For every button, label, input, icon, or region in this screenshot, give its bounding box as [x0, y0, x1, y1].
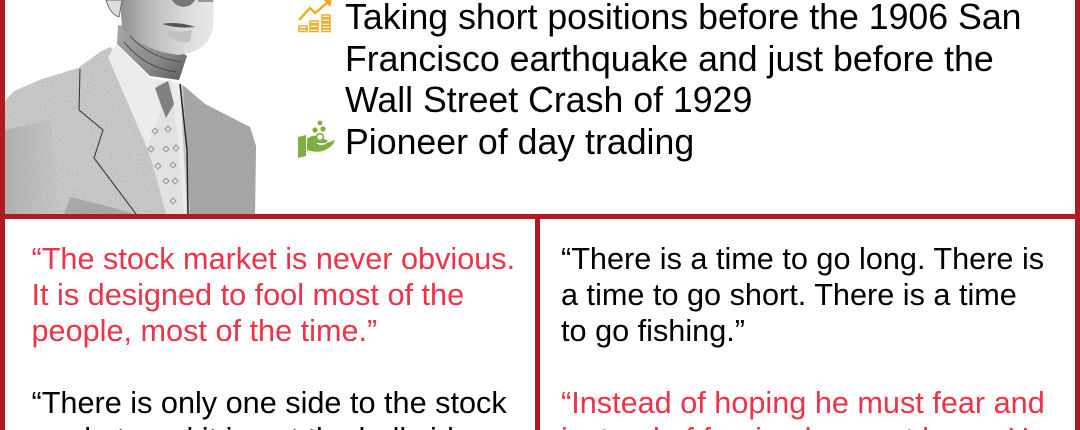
quotes: left column: “The stock market is never obvious. [32, 242, 515, 276]
text: achievements list: Pioneer of day trading [345, 122, 694, 162]
icon: rising chart with coins [298, 0, 332, 32]
text: achievements list [345, 0, 1022, 162]
quotes: left column: people, most of the time.” [32, 314, 377, 348]
tie [148, 80, 184, 214]
quotes: right column: a time to go short. There is a time [561, 278, 1017, 312]
quotes: left column: It is designed to fool most of the [32, 278, 464, 312]
quotes: right column: to go fishing.” [561, 314, 745, 348]
text: achievements list: Francisco earthquake and just before the [345, 39, 994, 79]
quotes: right column: “There is a time to go long. There is [561, 242, 1044, 276]
quotes: left column [32, 242, 515, 430]
glasses [198, 0, 213, 2]
quotes: left column: “There is only one side to the stock [32, 386, 507, 420]
face [120, 0, 214, 55]
quotes: right column [561, 242, 1046, 430]
jacket shading [183, 85, 256, 214]
right jacket edge [180, 84, 188, 214]
shirt [108, 44, 187, 214]
neck [117, 25, 187, 80]
icon: hand holding coins [298, 120, 335, 158]
portrait: man in suit and tie [5, 0, 256, 214]
ear [106, 0, 122, 17]
quotes: right column: “Instead of hoping he must fear and [561, 386, 1045, 420]
lapel outline [79, 69, 136, 214]
mouth [162, 23, 195, 28]
jacket [5, 47, 256, 214]
text: achievements list: Wall Street Crash of 1929 [345, 80, 752, 120]
nose shadow [172, 0, 195, 7]
